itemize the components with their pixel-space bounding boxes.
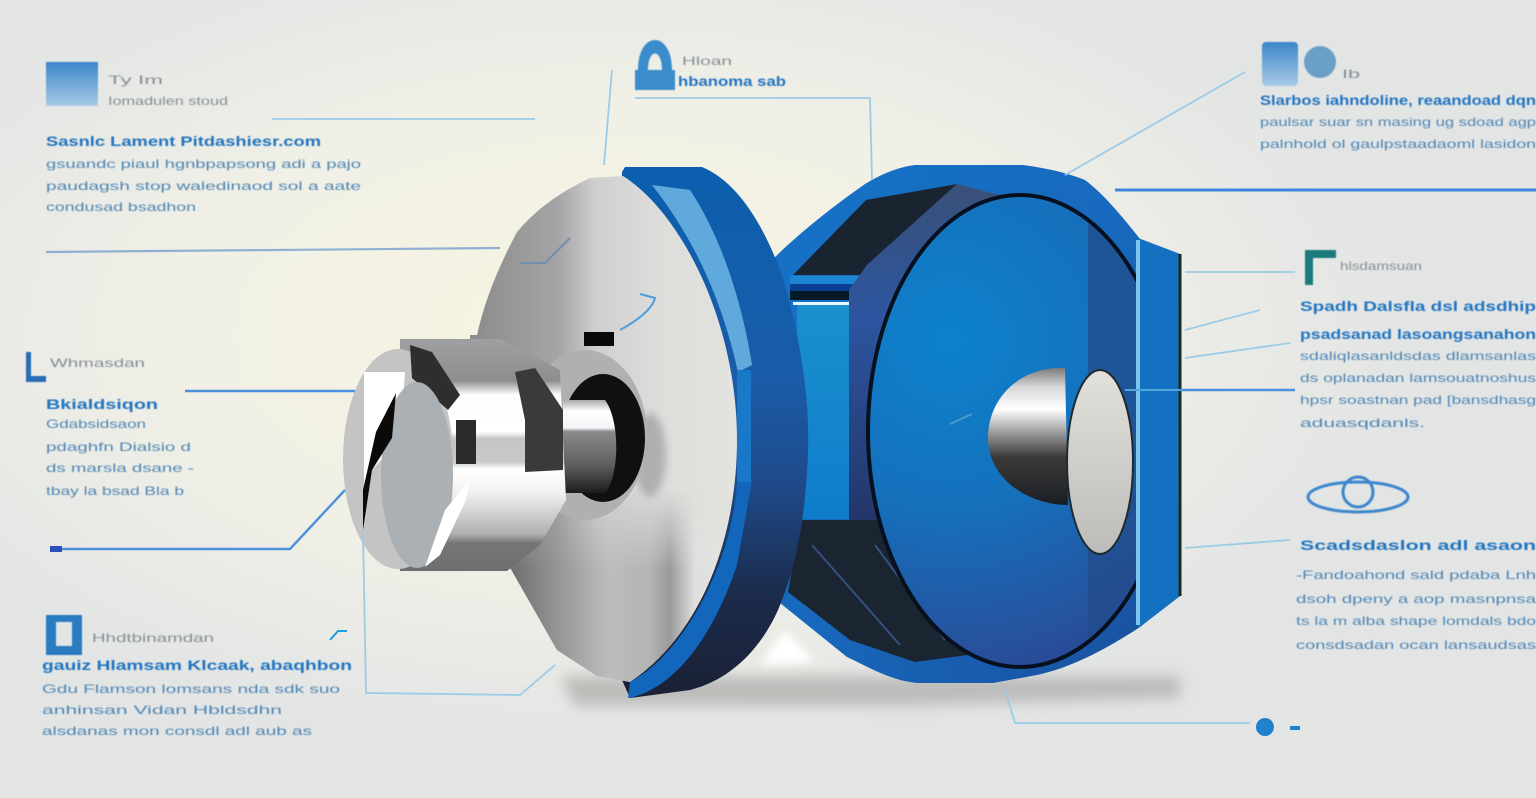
disc right light edge	[1136, 240, 1140, 625]
right knob stem	[988, 368, 1068, 505]
body: Gdu Flamson lomsans nda sdk suo	[42, 682, 341, 696]
label: Hloan	[682, 54, 732, 68]
body	[1300, 349, 1536, 430]
neck chrome	[563, 400, 616, 493]
dark upper recess	[793, 184, 957, 275]
body: -Fandoahond sald pdaba Lnh	[1296, 568, 1536, 582]
callout lines	[46, 70, 1536, 723]
icon: square	[1305, 250, 1336, 285]
dark slot bands	[790, 276, 868, 305]
blue connector	[797, 305, 849, 519]
body: consdsadan ocan lansaudsas	[1296, 638, 1536, 652]
icon: box	[46, 615, 82, 655]
callout: top left: Iomadulen stoud	[108, 94, 228, 108]
blue rim	[622, 167, 808, 698]
heading: psadsanad lasoangsanahon	[1300, 326, 1536, 342]
callout: bottom right	[1296, 477, 1536, 652]
heading: Bkialdsiqon	[46, 396, 158, 412]
small dark nub	[456, 420, 476, 464]
icon: eye	[1308, 477, 1408, 512]
icon: lock	[635, 40, 675, 90]
body: tbay la bsad Bla b	[46, 484, 184, 498]
rim mid bright band	[737, 370, 751, 482]
body	[46, 157, 362, 214]
callout: middle right	[1300, 250, 1536, 430]
body	[1296, 568, 1536, 652]
body	[42, 682, 341, 738]
ground shadow	[560, 676, 1180, 706]
end marker: dash	[1290, 726, 1300, 730]
heading	[1300, 298, 1536, 342]
callout: middle left	[26, 352, 194, 498]
body: gsuandc piaul hgnbpapsong adi a pajo	[46, 157, 361, 171]
body: alsdanas mon consdl adl aub as	[42, 724, 312, 738]
heading: Scadsdaslon adl asaon	[1300, 537, 1536, 553]
rim lower bright band	[628, 480, 752, 698]
small dark mark	[584, 332, 614, 346]
darker right section	[1088, 223, 1136, 640]
callout: bottom left	[42, 615, 352, 738]
inner face	[381, 382, 453, 568]
icon: circle	[1304, 46, 1336, 78]
body: aduasqdanls.	[1300, 416, 1425, 430]
body: ds oplanadan lamsouatnoshus	[1300, 371, 1536, 385]
silver lower shading	[510, 499, 732, 682]
front face crack	[363, 393, 396, 530]
side panel	[1138, 238, 1180, 628]
end marker: dot	[1256, 718, 1274, 736]
dark bevel	[515, 368, 563, 472]
body: sdaliqlasanldsdas dlamsanlas	[1300, 349, 1536, 363]
body: hpsr soastnan pad [bansdhasg	[1300, 393, 1536, 407]
label: Hhdtbinamdan	[92, 631, 214, 645]
start marker: left line	[50, 546, 62, 552]
dark lower recess	[788, 520, 975, 662]
body	[1260, 115, 1536, 151]
main disc	[866, 193, 1136, 669]
heading: Slarbos iahndoline, reaandoad dqn	[1260, 92, 1536, 108]
cylinder body	[400, 339, 566, 571]
recess stripes	[812, 545, 945, 645]
callout: top left	[46, 62, 362, 214]
outer blue housing	[770, 165, 1180, 683]
side panel edge	[1178, 254, 1182, 596]
body: pdaghfn Dialsio d	[46, 440, 191, 454]
shade behind neck	[634, 413, 666, 497]
body: ds marsla dsane -	[46, 461, 194, 475]
body: palnhold ol gaulpstaadaoml lasidon	[1260, 137, 1536, 151]
rim highlight	[652, 185, 752, 372]
body: paulsar suar sn masing ug sdoad agp	[1260, 115, 1536, 129]
callout: top center	[635, 40, 786, 90]
right blue lock body	[770, 165, 1180, 683]
label: hlsdamsuan	[1340, 259, 1422, 273]
white glow between discs	[760, 630, 815, 665]
left silver knob	[343, 167, 808, 698]
neck collar	[523, 350, 647, 520]
icon: panel	[1262, 42, 1298, 86]
label: Whmasdan	[50, 356, 145, 370]
white highlight	[364, 372, 405, 520]
body: paudagsh stop waledinaod sol a aate	[46, 179, 362, 193]
body: dsoh dpeny a aop masnpnsa	[1296, 592, 1536, 606]
label: Ty Im	[108, 73, 163, 87]
heading: Sasnlc Lament Pitdashiesr.com	[46, 133, 321, 149]
inner band	[849, 184, 1000, 520]
heading: gauiz Hlamsam Klcaak, abaqhbon	[42, 657, 352, 673]
callout: top right	[1260, 42, 1536, 151]
neck dark ring	[561, 374, 645, 502]
body: anhinsan Vidan Hbldsdhn	[42, 703, 282, 717]
icon: letter	[26, 352, 46, 382]
heading: Spadh Dalsfla dsl adsdhip	[1300, 298, 1536, 314]
silver disc	[470, 176, 737, 682]
body: condusad bsadhon	[46, 200, 196, 214]
body: ts la m alba shape lomdals bdo	[1296, 614, 1536, 628]
right knob face	[1067, 370, 1133, 554]
knob front ring	[343, 349, 453, 569]
label: Ib	[1342, 67, 1361, 81]
icon: panel	[46, 62, 98, 106]
heading: hbanoma sab	[678, 73, 786, 89]
body: Gdabsidsaon	[46, 417, 146, 431]
dark top arc	[410, 345, 460, 410]
lower white edge	[425, 480, 470, 567]
body	[46, 417, 194, 498]
